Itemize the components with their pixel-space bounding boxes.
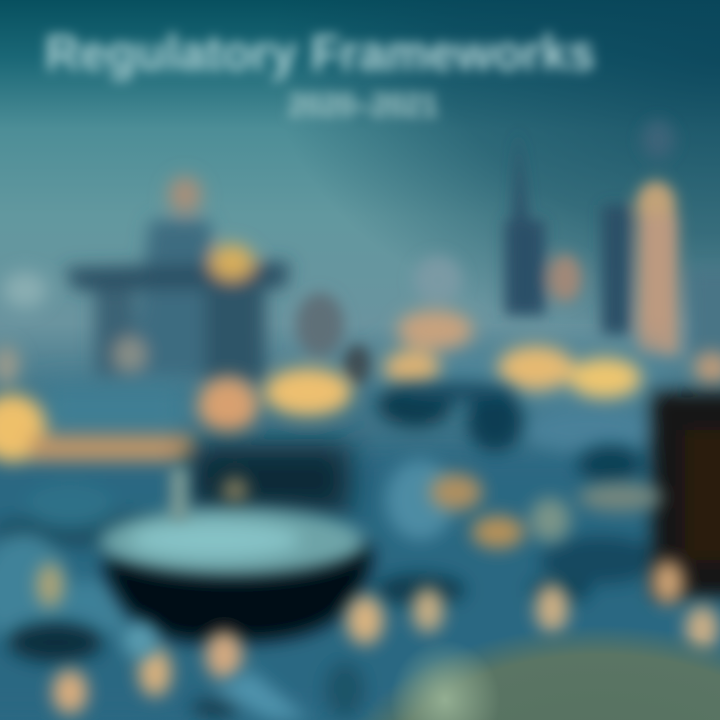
bowl <box>100 508 372 642</box>
bowl light rim <box>100 508 364 576</box>
lower scene base <box>0 350 720 720</box>
skyline: central tower left <box>0 176 290 385</box>
subtitle: 2020–2021 <box>288 87 438 123</box>
coin bokeh lights <box>37 474 718 714</box>
dark stacked shapes <box>190 445 350 515</box>
green coin bottom right <box>330 620 720 720</box>
glowing gold lights band <box>0 310 720 462</box>
bowl dark base <box>105 545 372 642</box>
bowl highlight <box>130 522 300 558</box>
skyline: right towers <box>296 120 720 385</box>
lower left water <box>122 622 365 720</box>
title: Regulatory Frameworks <box>45 25 595 81</box>
stem above bowl <box>170 468 188 520</box>
dark glass on right <box>652 392 720 597</box>
